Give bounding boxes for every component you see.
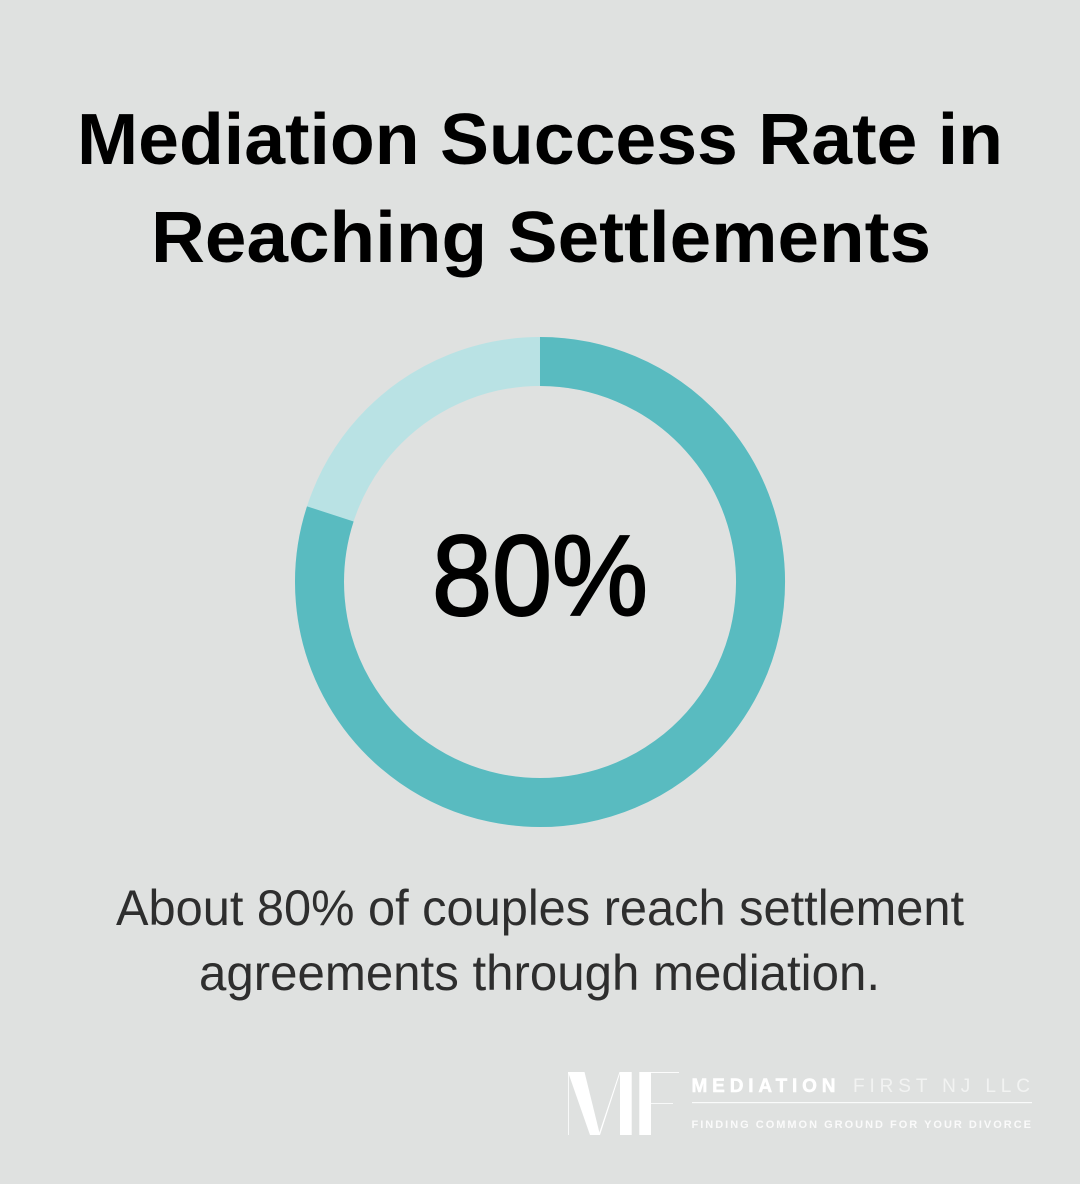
caption: agreements through mediation. bbox=[199, 945, 880, 1001]
logo mark: MF bbox=[568, 1072, 679, 1135]
title: Reaching Settlements bbox=[151, 198, 931, 278]
logo: FIRST NJ LLC bbox=[853, 1076, 1030, 1097]
logo name: MEDIATION bbox=[692, 1076, 836, 1097]
caption bbox=[116, 880, 964, 1001]
center value: 80% bbox=[432, 513, 648, 640]
caption: About 80% of couples reach settlement bbox=[116, 880, 964, 936]
logo tagline: FINDING COMMON GROUND FOR YOUR DIVORCE bbox=[692, 1119, 1031, 1131]
donut chart: 80% bbox=[320, 362, 761, 802]
title: Mediation Success Rate in bbox=[77, 100, 1003, 180]
logo bbox=[568, 1072, 1032, 1135]
title bbox=[77, 100, 1003, 278]
